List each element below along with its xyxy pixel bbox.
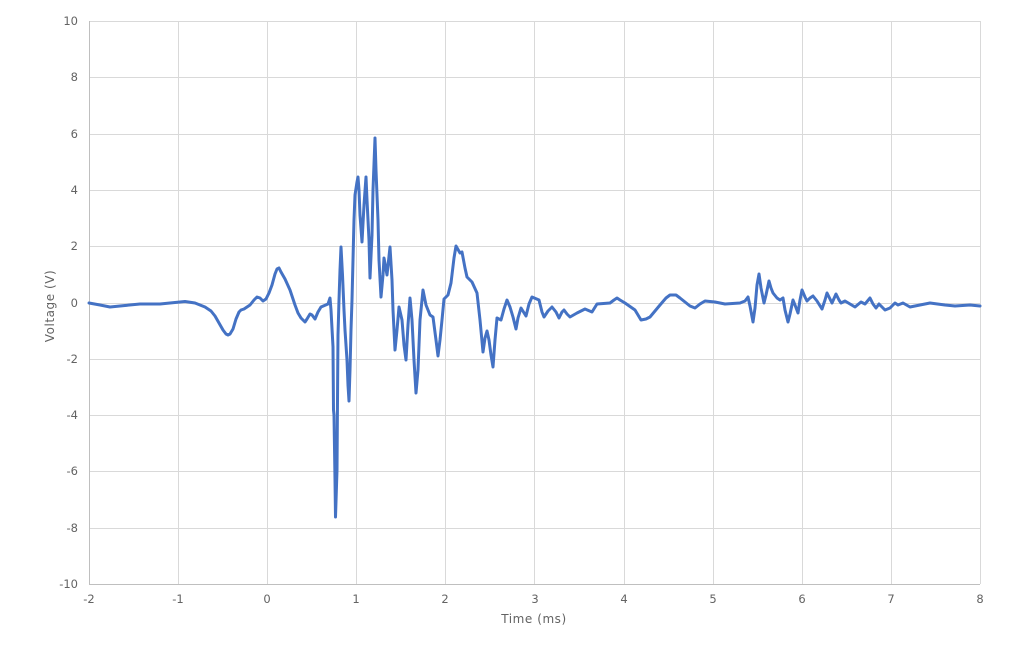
y-axis tick labels: 6 [71, 127, 78, 141]
x-axis tick labels: 5 [709, 592, 717, 606]
x-axis tick labels: 6 [798, 592, 806, 606]
voltage waveform [89, 138, 980, 517]
y-axis tick labels: -6 [67, 464, 78, 478]
x-axis tick labels: 2 [441, 592, 449, 606]
y-axis title: Voltage (V) [43, 270, 57, 342]
y-axis tick labels: 2 [71, 239, 78, 253]
y-axis tick labels: 4 [71, 183, 78, 197]
x-axis tick labels [83, 592, 984, 606]
x-axis tick labels: 8 [976, 592, 984, 606]
x-axis tick labels: 3 [531, 592, 539, 606]
y-axis tick labels: -8 [67, 521, 78, 535]
y-axis tick labels: 0 [71, 296, 78, 310]
y-axis tick labels: -10 [59, 577, 78, 591]
y-axis tick labels: 8 [71, 70, 78, 84]
x-axis tick labels: -2 [83, 592, 95, 606]
y-axis tick labels: -2 [67, 352, 78, 366]
y-axis tick labels [59, 14, 78, 591]
x-axis tick labels: 4 [620, 592, 628, 606]
x-axis title: Time (ms) [500, 612, 567, 626]
x-axis tick labels: 1 [352, 592, 360, 606]
x-axis tick labels: 0 [263, 592, 271, 606]
x-axis tick labels: -1 [172, 592, 184, 606]
y-axis tick labels: 10 [63, 14, 78, 28]
x-axis tick labels: 7 [887, 592, 895, 606]
y-axis tick labels: -4 [67, 408, 78, 422]
